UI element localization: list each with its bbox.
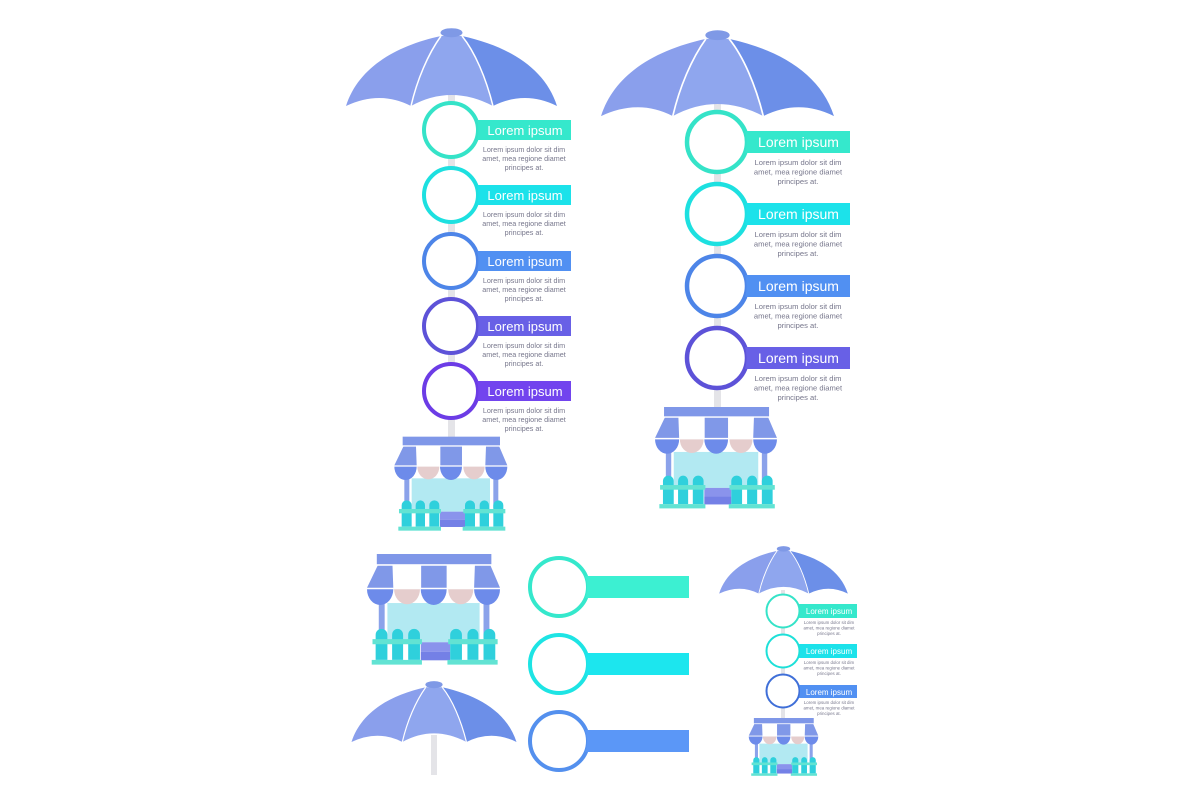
step 1 — [766, 594, 857, 636]
panel: blank label bars — [530, 558, 689, 770]
step 2 — [687, 184, 850, 258]
step 2 — [766, 634, 857, 676]
step 4: Lorem ipsum dolor sit dim — [755, 374, 841, 383]
step 4: amet, mea regione diamet — [482, 350, 566, 359]
step 4 — [687, 328, 850, 402]
blank label 2 — [530, 635, 689, 693]
step 4: Lorem ipsum — [487, 319, 563, 334]
blank label 3 — [530, 712, 689, 770]
step 3: principes at. — [505, 294, 543, 303]
step 2: Lorem ipsum dolor sit dim — [804, 660, 854, 665]
step 5: principes at. — [505, 424, 543, 433]
step 2: Lorem ipsum dolor sit dim — [483, 210, 565, 219]
step 2: amet, mea regione diamet — [482, 219, 566, 228]
step 1 — [424, 103, 571, 172]
step 2: amet, mea regione diamet — [754, 240, 843, 248]
step 4: Lorem ipsum — [758, 350, 839, 366]
step 1 — [687, 112, 850, 186]
step 1: Lorem ipsum dolor sit dim — [804, 620, 854, 625]
step 3: Lorem ipsum dolor sit dim — [804, 700, 854, 705]
step 2: Lorem ipsum — [758, 206, 839, 222]
blank label 1 — [530, 558, 689, 616]
step 2: Lorem ipsum — [487, 188, 563, 203]
pole — [448, 90, 455, 440]
pole — [781, 590, 785, 720]
step 3 — [424, 234, 571, 303]
step 4: Lorem ipsum dolor sit dim — [483, 341, 565, 350]
step 5 — [424, 364, 571, 433]
step 3: principes at. — [778, 321, 818, 330]
step 2: Lorem ipsum dolor sit dim — [755, 230, 841, 239]
step 1: principes at. — [505, 163, 543, 172]
step 1: Lorem ipsum dolor sit dim — [483, 145, 565, 154]
step 1: Lorem ipsum — [806, 607, 852, 616]
icon: shop — [749, 718, 818, 776]
step 3: Lorem ipsum — [487, 254, 563, 269]
step 1: amet, mea regione diamet — [803, 626, 855, 630]
step 4 — [424, 299, 571, 368]
step 5: Lorem ipsum dolor sit dim — [483, 406, 565, 415]
step 3: principes at. — [817, 711, 841, 716]
icon: shop, standalone — [367, 554, 500, 665]
step 3: amet, mea regione diamet — [754, 312, 843, 320]
icon: umbrella — [601, 30, 834, 116]
icon: umbrella — [719, 546, 848, 594]
step 3: amet, mea regione diamet — [482, 285, 566, 294]
step 2 — [424, 168, 571, 237]
step 5: amet, mea regione diamet — [482, 415, 566, 424]
step 3: Lorem ipsum dolor sit dim — [755, 302, 841, 311]
icon: standalone umbrella with pole — [351, 681, 517, 775]
panel: large infographic with four steps — [601, 30, 850, 508]
panel: small infographic with three steps — [719, 546, 857, 776]
step 4: principes at. — [505, 359, 543, 368]
step 2: principes at. — [778, 249, 818, 258]
step 3: Lorem ipsum dolor sit dim — [483, 276, 565, 285]
step 1: principes at. — [778, 177, 818, 186]
step 3: amet, mea regione diamet — [803, 706, 855, 710]
step 3 — [766, 674, 857, 716]
step 1: amet, mea regione diamet — [482, 154, 566, 163]
step 3: Lorem ipsum — [806, 688, 852, 697]
step 1: Lorem ipsum dolor sit dim — [755, 158, 841, 167]
step 2: Lorem ipsum — [806, 647, 852, 656]
icon: shop — [655, 407, 777, 508]
pole — [714, 100, 721, 410]
step 2: amet, mea regione diamet — [803, 666, 855, 670]
step 1: Lorem ipsum — [758, 134, 839, 150]
step 2: principes at. — [817, 671, 841, 676]
step 2: principes at. — [505, 228, 543, 237]
step 1: amet, mea regione diamet — [754, 168, 843, 176]
icon: shop — [394, 437, 507, 531]
step 4: amet, mea regione diamet — [754, 384, 843, 392]
step 3 — [687, 256, 850, 330]
icon: umbrella — [346, 28, 557, 106]
step 3: Lorem ipsum — [758, 278, 839, 294]
step 5: Lorem ipsum — [487, 384, 563, 399]
step 4: principes at. — [778, 393, 818, 402]
step 1: principes at. — [817, 631, 841, 636]
step 1: Lorem ipsum — [487, 123, 563, 138]
panel: large infographic with five steps — [346, 28, 571, 531]
